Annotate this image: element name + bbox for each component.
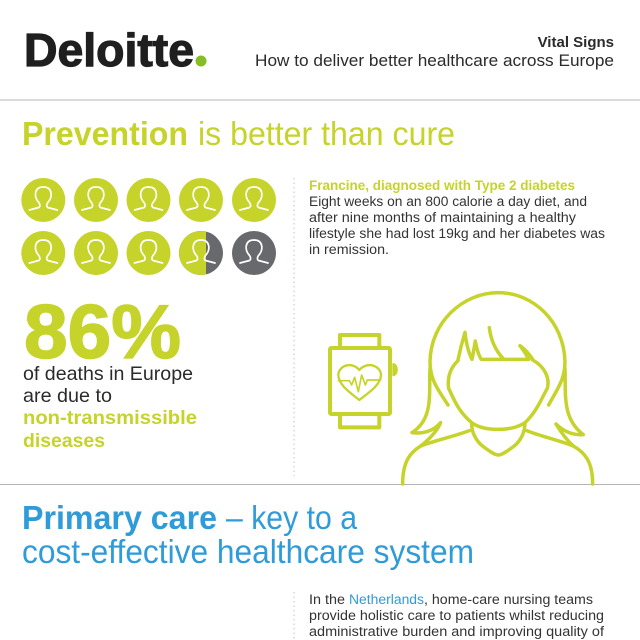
hair outline (430, 293, 565, 405)
icon: person 4 (179, 178, 223, 222)
statistic caption: are due to (23, 385, 112, 407)
icon: person 2 (74, 178, 118, 222)
case study: Francine: after nine months of maintaining a healthy (309, 210, 576, 225)
header title: Vital Signs (538, 34, 614, 51)
illustration: woman with bob haircut (403, 293, 593, 484)
people icon grid: 8.5 of 10 (21, 178, 276, 275)
icon: person 9 partial (179, 231, 223, 275)
case study: Francine (309, 178, 605, 257)
text block: Netherlands: administrative burden and improving quality of (309, 624, 604, 639)
icon: person 8 (126, 231, 170, 275)
statistic caption: of deaths in Europe (23, 363, 193, 385)
statistic caption (23, 363, 197, 452)
heading: primary care: Primary care (22, 499, 217, 536)
heading: prevention: Prevention (22, 115, 188, 152)
heading: primary care (22, 499, 474, 570)
heading: prevention: is better than cure (198, 115, 455, 152)
fringe (458, 332, 533, 360)
text block: Netherlands: Netherlands (349, 592, 424, 607)
icon: person 10 grey (232, 231, 276, 275)
icon: person 7 (74, 231, 118, 275)
text block: Netherlands: , home-care nursing teams (424, 592, 593, 607)
icon: person 3 (126, 178, 170, 222)
statistic caption: diseases (23, 430, 105, 452)
heading: primary care: cost-effective healthcare system (22, 533, 474, 570)
statistic caption: non-transmissible (23, 407, 197, 429)
logo: Deloitte: Deloitte (24, 24, 194, 76)
text block: Netherlands: provide holistic care to patients whilst reducing (309, 608, 604, 623)
text block: Netherlands (309, 592, 604, 639)
statistic: 86%: 86% (24, 290, 181, 375)
icon: smartwatch with heart (330, 335, 397, 427)
case study: Francine: Eight weeks on an 800 calorie a day diet, and (309, 194, 587, 209)
heading: prevention (22, 115, 455, 152)
text block: Netherlands: In the (309, 592, 345, 607)
header title: How to deliver better healthcare across Europe (255, 51, 614, 70)
heading: primary care: – key to a (226, 499, 358, 536)
case study: Francine: in remission. (309, 242, 389, 257)
icon: person 6 (21, 231, 65, 275)
header title (255, 34, 614, 70)
case study: Francine: lifestyle she had lost 19kg and her diabetes was (309, 226, 605, 241)
shoulders (403, 431, 469, 484)
neck (472, 423, 525, 455)
icon: person 5 (232, 178, 276, 222)
face (448, 360, 548, 429)
case study: Francine: Francine, diagnosed with Type 2 diabetes (309, 178, 575, 193)
icon: person 1 (21, 178, 65, 222)
